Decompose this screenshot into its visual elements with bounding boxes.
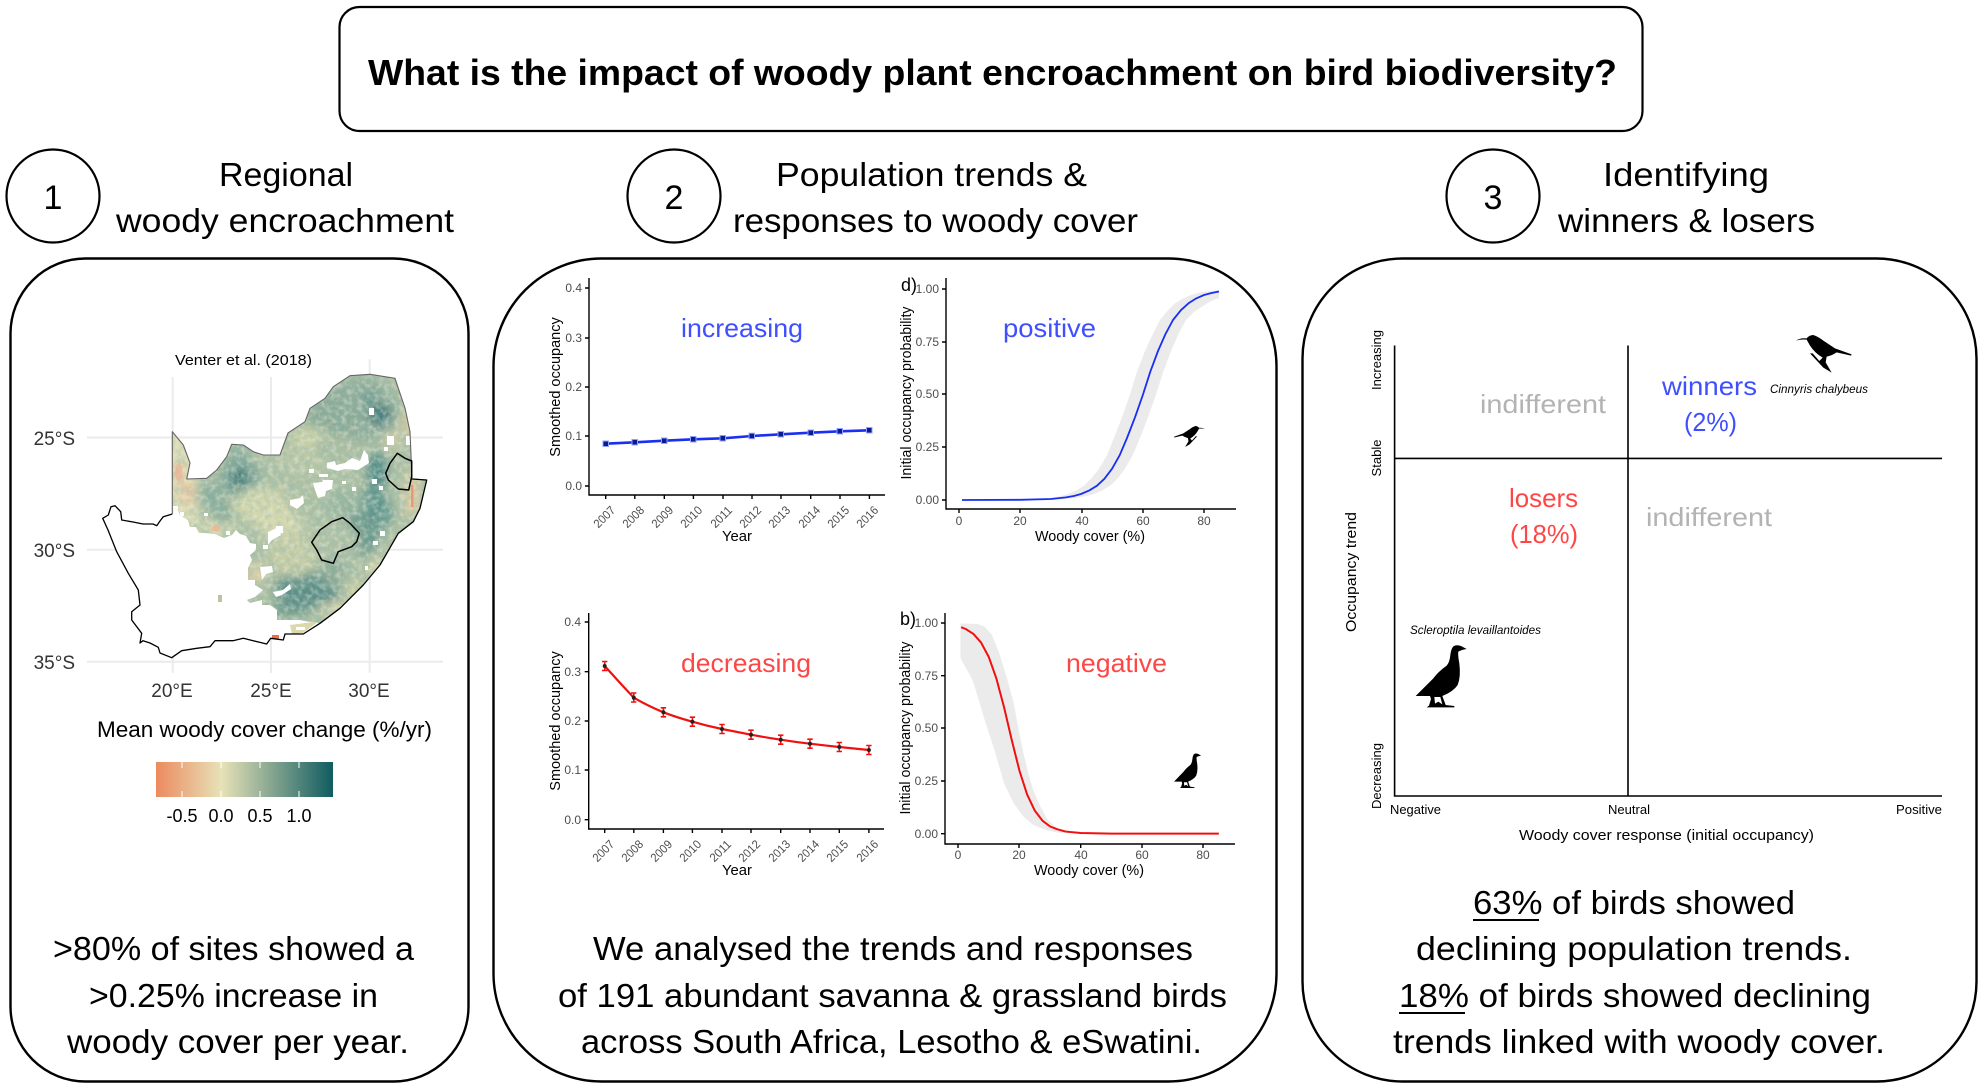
chart: negative response: 0.50 — [915, 721, 938, 735]
heading: regional woody encroachment: woody encroachment — [115, 202, 454, 239]
quadrant chart — [1343, 330, 1942, 844]
chart: positive response: 0.75 — [916, 335, 939, 349]
chart: negative response: 0.75 — [915, 669, 938, 683]
text: analysis summary: We analysed the trends and responses — [593, 930, 1193, 967]
chart: decreasing trend: 2015 — [824, 837, 851, 865]
legend: mean woody cover change: -0.5 — [166, 806, 198, 826]
quadrant chart: Stable — [1370, 439, 1384, 476]
label: losers: (18%) — [1510, 519, 1578, 549]
text: key findings: declining population trends. — [1416, 930, 1852, 967]
chart: decreasing trend: 2016 — [854, 837, 881, 865]
chart: increasing trend: Year — [722, 528, 752, 545]
heading: population trends — [733, 156, 1138, 239]
heading: regional woody encroachment — [115, 156, 454, 239]
quadrant chart: Increasing — [1370, 330, 1384, 390]
map axis labels: 20°E — [151, 681, 193, 702]
chart: positive response: 0.50 — [916, 387, 939, 401]
icon: Scleroptila levaillantoides: Scleroptila levaillantoides — [1410, 625, 1541, 637]
chart: negative response: 0.25 — [915, 774, 938, 788]
label: losers: losers — [1509, 483, 1578, 513]
chart: decreasing trend: Year — [722, 862, 752, 879]
coloured raster and country outlines — [103, 365, 435, 658]
chart: decreasing trend: 0.1 — [564, 763, 581, 777]
quadrant chart: indifferent — [1480, 389, 1607, 419]
chart: increasing trend: 2013 — [766, 503, 793, 531]
chart: decreasing trend: decreasing — [681, 648, 811, 678]
chart: decreasing trend: 0.2 — [564, 714, 581, 728]
heading: regional woody encroachment: Regional — [219, 156, 353, 193]
chart: positive response: 80 — [1197, 514, 1211, 528]
number badge 1 — [6, 150, 100, 242]
panel: regional woody encroachment — [10, 258, 468, 1082]
text: encroachment finding: >80% of sites showed a — [53, 930, 415, 967]
chart: positive response: 20 — [1013, 514, 1027, 528]
map axis labels: 30°E — [348, 681, 390, 702]
chart: increasing trend: 2011 — [708, 503, 735, 531]
chart: decreasing trend — [548, 613, 884, 879]
chart: positive response: Woody cover (%) — [1035, 528, 1145, 545]
chart: increasing trend: 0.4 — [565, 281, 582, 295]
chart: increasing trend — [548, 278, 885, 545]
chart: positive response: 60 — [1136, 514, 1150, 528]
heading: population trends: Population trends & — [776, 156, 1087, 193]
chart: negative response: 60 — [1135, 848, 1149, 862]
chart: increasing trend: 0.1 — [565, 429, 582, 443]
map: woody cover change — [34, 352, 443, 702]
section 2 header — [628, 150, 1138, 242]
map axis labels: 30°S — [34, 541, 75, 562]
title — [340, 7, 1642, 131]
chart: increasing trend: 0.2 — [565, 380, 582, 394]
label: winners: (2%) — [1684, 407, 1737, 437]
chart: positive response: 1.00 — [916, 282, 939, 296]
chart: increasing trend: 0.0 — [565, 479, 582, 493]
map grid — [87, 359, 443, 673]
chart: negative response: 40 — [1074, 848, 1088, 862]
text: key findings: trends linked with woody cover. — [1393, 1023, 1885, 1060]
quadrant chart: Neutral — [1608, 803, 1650, 817]
chart: decreasing trend: 2012 — [736, 837, 763, 865]
map axis labels: 25°S — [34, 429, 75, 450]
chart: negative response: 1.00 — [915, 616, 938, 630]
text: encroachment finding — [53, 930, 415, 1060]
chart: positive response: d) — [901, 275, 917, 295]
chart: decreasing trend: 2014 — [795, 837, 822, 865]
label: winners — [1661, 371, 1757, 437]
heading: population trends: responses to woody cover — [733, 202, 1138, 239]
title: What is the impact of woody plant encroachment on bird biodiversity? — [368, 52, 1617, 93]
icon: Cinnyris chalybeus — [1770, 335, 1868, 396]
chart: increasing trend: 2014 — [796, 503, 823, 531]
section 3 header — [1446, 150, 1815, 242]
chart: decreasing trend: 0.3 — [564, 665, 581, 679]
number badge 1: 1 — [44, 179, 62, 217]
number badge 3: 3 — [1484, 179, 1502, 217]
chart: negative response: 0 — [955, 848, 962, 862]
chart: positive response: Initial occupancy probability — [899, 306, 915, 480]
section 1 header — [6, 150, 454, 242]
label: losers — [1509, 483, 1578, 549]
chart: positive response: positive — [1003, 313, 1096, 343]
icon: Cinnyris chalybeus: Cinnyris chalybeus — [1770, 384, 1868, 396]
chart: increasing trend: 2010 — [678, 503, 705, 531]
legend: mean woody cover change: 0.5 — [247, 806, 273, 826]
chart: positive response: 0 — [956, 514, 963, 528]
chart: decreasing trend: Smoothed occupancy — [548, 651, 564, 791]
chart: increasing trend: 2016 — [854, 503, 881, 531]
legend: mean woody cover change: 0.0 — [208, 806, 234, 826]
text: analysis summary: across South Africa, Lesotho & eSwatini. — [581, 1023, 1202, 1060]
chart: decreasing trend: 2011 — [707, 837, 734, 865]
chart: increasing trend: 0.3 — [565, 331, 582, 345]
panel: population trends and responses — [494, 258, 1276, 1082]
chart: increasing trend: 2007 — [591, 503, 618, 531]
number badge 2 — [628, 150, 720, 242]
chart: positive response — [899, 275, 1236, 545]
quadrant chart: Occupancy trend — [1343, 512, 1360, 632]
chart: decreasing trend: 2010 — [677, 837, 704, 865]
legend: mean woody cover change: 1.0 — [286, 806, 312, 826]
chart: negative response: 20 — [1012, 848, 1026, 862]
heading: winners and losers — [1557, 156, 1815, 239]
chart: increasing trend: 2012 — [737, 503, 764, 531]
icon: sunbird silhouette — [1174, 426, 1205, 447]
number badge 3 — [1446, 150, 1540, 242]
panel: winners and losers — [1302, 258, 1976, 1082]
map citation: Venter et al. (2018) — [175, 352, 312, 369]
heading: winners and losers: winners & losers — [1557, 202, 1815, 239]
quadrant chart: Decreasing — [1370, 743, 1384, 809]
chart: increasing trend: Smoothed occupancy — [548, 317, 564, 457]
quadrant chart: Positive — [1896, 803, 1942, 817]
text: analysis summary: of 191 abundant savanna & grassland birds — [558, 977, 1227, 1014]
isolated coastal patches — [218, 595, 318, 638]
chart: increasing trend: 2009 — [649, 503, 676, 531]
chart: increasing trend: 2015 — [825, 503, 852, 531]
map axis labels — [34, 429, 390, 702]
chart: decreasing trend: 0.4 — [564, 615, 581, 629]
heading: winners and losers: Identifying — [1603, 156, 1769, 193]
chart: decreasing trend: 2013 — [766, 837, 793, 865]
icon: Scleroptila levaillantoides — [1410, 625, 1541, 707]
chart: negative response: b) — [900, 609, 916, 629]
chart: decreasing trend: 2007 — [590, 837, 617, 865]
chart: negative response: 80 — [1196, 848, 1210, 862]
number badge 2: 2 — [665, 179, 683, 217]
quadrant chart: indifferent — [1646, 502, 1773, 532]
map axis labels: 35°S — [34, 653, 75, 674]
icon: francolin silhouette — [1174, 753, 1201, 788]
text: key findings: 63% of birds showed — [1473, 884, 1795, 921]
chart: increasing trend: 2008 — [620, 503, 647, 531]
text: key findings: 18% of birds showed declining — [1399, 977, 1871, 1014]
label: winners: winners — [1661, 371, 1757, 401]
text: key findings — [1393, 884, 1885, 1060]
chart: increasing trend: increasing — [681, 313, 803, 343]
map axis labels: 25°E — [250, 681, 292, 702]
chart: decreasing trend: 0.0 — [564, 813, 581, 827]
chart: negative response — [898, 609, 1235, 879]
quadrant chart: Negative — [1390, 803, 1441, 817]
chart: negative response: negative — [1066, 648, 1167, 678]
legend: mean woody cover change — [97, 717, 432, 826]
chart: decreasing trend: 2008 — [619, 837, 646, 865]
chart: positive response: 0.00 — [916, 493, 939, 507]
text: encroachment finding: woody cover per year. — [66, 1023, 409, 1060]
text: encroachment finding: >0.25% increase in — [89, 977, 378, 1014]
chart: negative response: Initial occupancy probability — [898, 641, 914, 814]
chart: positive response: 0.25 — [916, 440, 939, 454]
legend: mean woody cover change: Mean woody cover change (%/yr) — [97, 717, 432, 742]
chart: negative response: 0.00 — [915, 827, 938, 841]
text: analysis summary — [558, 930, 1227, 1060]
quadrant chart: Woody cover response (initial occupancy) — [1519, 827, 1814, 844]
chart: decreasing trend: 2009 — [648, 837, 675, 865]
chart: negative response: Woody cover (%) — [1034, 862, 1144, 879]
chart: positive response: 40 — [1075, 514, 1089, 528]
